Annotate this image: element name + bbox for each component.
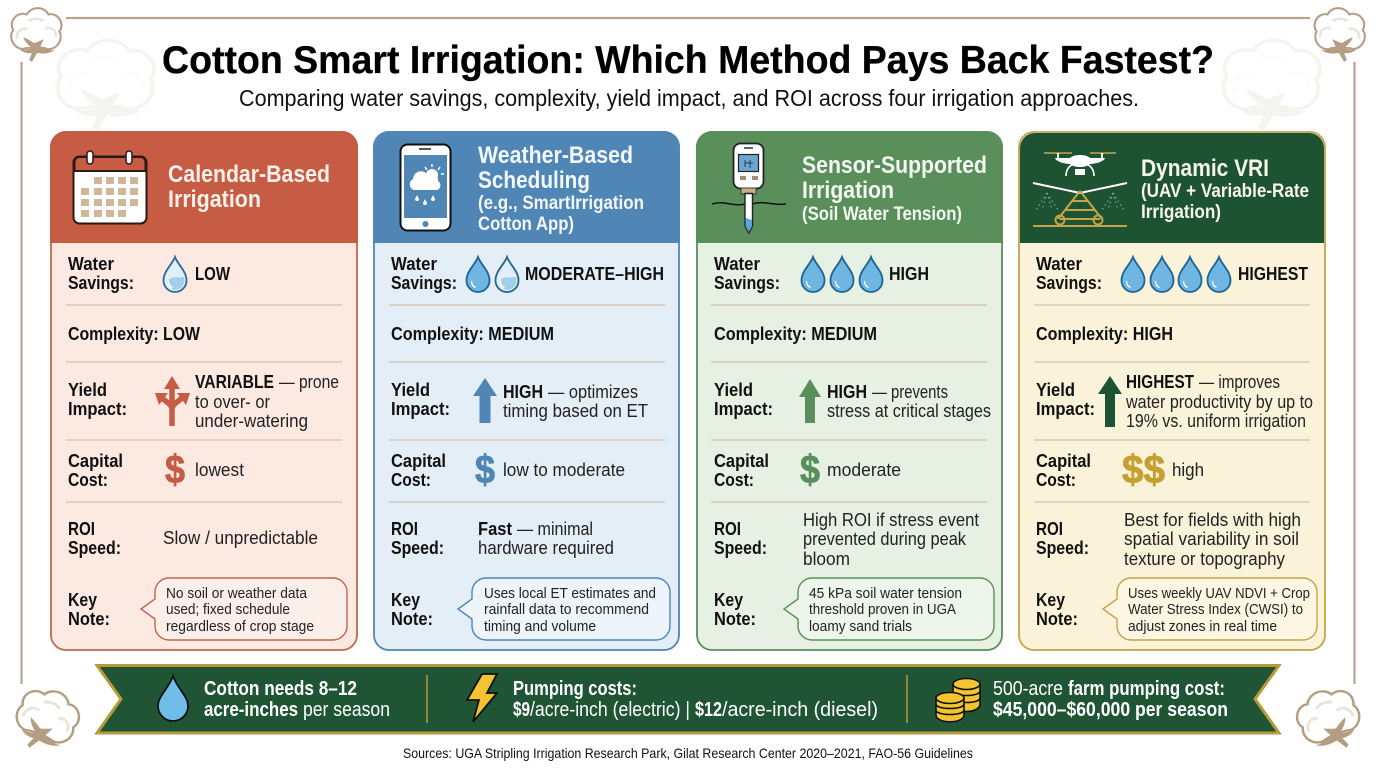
yield impact row xyxy=(714,379,991,423)
roi speed row: texture or topography xyxy=(1124,549,1285,569)
complexity row: Complexity: LOW xyxy=(68,324,200,344)
key note callout: Key xyxy=(1036,590,1065,610)
icon: drone and pivot irrigation xyxy=(1033,153,1127,226)
complexity row: Complexity: MEDIUM xyxy=(714,324,877,344)
water savings row: Water xyxy=(1036,254,1082,274)
key note callout: Note: xyxy=(68,609,110,629)
water savings row: Savings: xyxy=(714,273,780,293)
roi speed row: ROI xyxy=(68,519,95,539)
fact: pumping costs: $12 xyxy=(695,699,722,721)
key note callout: Uses weekly UAV NDVI + Crop xyxy=(1128,586,1310,602)
yield impact row: Impact: xyxy=(68,399,127,419)
icon: lightning bolt xyxy=(467,674,497,722)
key note callout: 45 kPa soil water tension xyxy=(809,586,962,602)
key note callout: No soil or weather data xyxy=(166,586,308,602)
key note callout: adjust zones in real time xyxy=(1128,619,1277,635)
icon: branching arrows xyxy=(155,376,190,426)
roi speed row: bloom xyxy=(803,549,850,569)
roi speed row xyxy=(68,519,318,558)
heading xyxy=(1141,155,1309,223)
subtitle: Comparing water savings, complexity, yield impact, and ROI across four irrigation approaches. xyxy=(239,85,1139,111)
yield impact row: Yield xyxy=(714,380,753,400)
roi speed row: Fast xyxy=(478,519,512,539)
key note callout: Note: xyxy=(391,609,433,629)
heading: (e.g., SmartIrrigation xyxy=(478,193,644,214)
water savings row: HIGHEST xyxy=(1238,264,1308,284)
key note callout: Water Stress Index (CWSI) to xyxy=(1128,602,1303,618)
panel: weather-based scheduling xyxy=(373,131,680,650)
heading: Weather-Based xyxy=(478,142,633,169)
fact: water need: Cotton needs 8–12 xyxy=(204,678,357,700)
heading: Dynamic VRI xyxy=(1141,155,1269,182)
water savings row: Water xyxy=(714,254,760,274)
icon: cotton boll bottom right xyxy=(1290,681,1369,761)
yield impact row: — improves xyxy=(1199,372,1280,392)
roi speed row: Best for fields with high xyxy=(1124,510,1301,530)
heading: Scheduling xyxy=(478,167,590,194)
yield impact row: Impact: xyxy=(714,399,773,419)
yield impact row: Yield xyxy=(68,380,107,400)
capital cost row: Capital xyxy=(391,451,446,471)
fact: water need xyxy=(158,676,390,721)
key note callout: timing and volume xyxy=(484,619,596,635)
yield impact row: — optimizes xyxy=(548,382,638,402)
key note callout: Uses local ET estimates and xyxy=(484,586,656,602)
watermark: cotton right xyxy=(1223,40,1320,131)
complexity row: Complexity: MEDIUM xyxy=(391,324,554,344)
capital cost row: Cost: xyxy=(391,470,431,490)
sources: Sources: UGA Stripling Irrigation Research Park, Gilat Research Center 2020–2021, FAO-56 Guidelines xyxy=(403,745,973,761)
water savings row xyxy=(1036,254,1308,293)
icon: cotton boll bottom left xyxy=(7,681,86,761)
heading xyxy=(802,152,987,225)
key note callout: Key xyxy=(68,590,97,610)
key note callout: threshold proven in UGA xyxy=(809,602,956,618)
yield impact row: Impact: xyxy=(1036,399,1095,419)
capital cost row: Capital xyxy=(714,451,769,471)
fact: pumping costs xyxy=(467,674,878,722)
capital cost row xyxy=(1036,448,1204,492)
roi speed row: Speed: xyxy=(714,538,767,558)
key note callout xyxy=(391,578,670,640)
water savings row: Savings: xyxy=(1036,273,1102,293)
key note callout: Note: xyxy=(1036,609,1078,629)
water savings row: HIGH xyxy=(889,264,929,284)
icon: up arrow xyxy=(473,378,497,423)
key note callout: Note: xyxy=(714,609,756,629)
complexity row: Complexity: HIGH xyxy=(1036,324,1173,344)
capital cost row: $ xyxy=(165,448,185,492)
capital cost row: Cost: xyxy=(714,470,754,490)
yield impact row: under-watering xyxy=(195,411,308,431)
yield impact row: timing based on ET xyxy=(503,401,648,421)
capital cost row xyxy=(391,448,625,492)
capital cost row: Capital xyxy=(68,451,123,471)
watermark: cotton left xyxy=(57,40,154,131)
yield impact row: HIGH xyxy=(827,382,867,402)
title: Cotton Smart Irrigation: Which Method Pays Back Fastest? xyxy=(162,39,1214,82)
key note callout: loamy sand trials xyxy=(809,619,912,635)
fact: pumping costs: Pumping costs: xyxy=(513,678,637,700)
key note callout: Key xyxy=(391,590,420,610)
icon: soil sensor probe xyxy=(712,144,786,233)
capital cost row: $$ xyxy=(1122,448,1165,492)
fact: farm cost: 500-acre xyxy=(993,678,1063,700)
yield impact row: to over- or xyxy=(195,392,270,412)
fact: water need: per season xyxy=(303,699,390,721)
roi speed row xyxy=(714,510,979,569)
roi speed row: Speed: xyxy=(391,538,444,558)
roi speed row xyxy=(1036,510,1301,569)
fact: pumping costs: /acre-inch (diesel) xyxy=(722,699,878,721)
water savings row: LOW xyxy=(195,264,230,284)
water savings row xyxy=(714,254,929,293)
key note callout: rainfall data to recommend xyxy=(484,602,649,618)
yield impact row: HIGHEST xyxy=(1126,372,1194,392)
key note callout xyxy=(68,578,347,640)
icon: cotton boll top left xyxy=(11,8,61,62)
roi speed row xyxy=(391,519,614,558)
water savings row: Savings: xyxy=(391,273,457,293)
heading: (UAV + Variable-Rate xyxy=(1141,181,1309,202)
yield impact row: stress at critical stages xyxy=(827,401,991,421)
yield impact row xyxy=(1036,372,1313,431)
roi speed row: Speed: xyxy=(68,538,121,558)
yield impact row: Yield xyxy=(391,380,430,400)
fact: farm cost: farm pumping cost: xyxy=(1068,678,1225,700)
capital cost row: $ xyxy=(475,448,495,492)
capital cost row: Cost: xyxy=(1036,470,1076,490)
yield impact row: Yield xyxy=(1036,380,1075,400)
heading: (Soil Water Tension) xyxy=(802,204,962,225)
yield impact row: Impact: xyxy=(391,399,450,419)
heading xyxy=(168,161,330,213)
roi speed row: — minimal xyxy=(517,519,593,539)
yield impact row: VARIABLE xyxy=(195,372,274,392)
key note callout: regardless of crop stage xyxy=(166,619,314,635)
heading: Sensor-Supported xyxy=(802,152,987,179)
panel: calendar-based irrigation xyxy=(50,131,358,650)
icon: water drop xyxy=(158,676,188,721)
heading: Calendar-Based xyxy=(168,161,330,188)
banner: key facts xyxy=(97,666,1279,733)
yield impact row: — prone xyxy=(279,372,339,392)
roi speed row: spatial variability in soil xyxy=(1124,529,1299,549)
roi speed row: ROI xyxy=(391,519,418,539)
water savings row: Water xyxy=(391,254,437,274)
fact: farm cost: $45,000–$60,000 per season xyxy=(993,699,1228,721)
capital cost row: Capital xyxy=(1036,451,1091,471)
heading: Cotton App) xyxy=(478,214,574,235)
heading: Irrigation) xyxy=(1141,202,1221,223)
icon: smartphone with weather xyxy=(400,144,450,230)
yield impact row: — prevents xyxy=(872,382,948,402)
water savings row: MODERATE–HIGH xyxy=(525,264,664,284)
capital cost row xyxy=(714,448,901,492)
capital cost row: high xyxy=(1172,460,1204,480)
capital cost row: moderate xyxy=(827,460,901,480)
roi speed row: ROI xyxy=(1036,519,1063,539)
capital cost row: lowest xyxy=(195,460,244,480)
capital cost row: Cost: xyxy=(68,470,108,490)
roi speed row: ROI xyxy=(714,519,741,539)
heading: Irrigation xyxy=(168,186,261,213)
fact: farm cost xyxy=(936,678,1228,722)
yield impact row: 19% vs. uniform irrigation xyxy=(1126,411,1306,431)
yield impact row: HIGH xyxy=(503,382,543,402)
fact: water need: acre-inches xyxy=(204,699,298,721)
icon: up arrow xyxy=(799,379,821,423)
key note callout xyxy=(1036,578,1317,640)
water savings row xyxy=(391,254,664,293)
yield impact row xyxy=(391,378,648,423)
roi speed row: prevented during peak xyxy=(803,529,967,549)
icon: coin stacks xyxy=(936,678,980,722)
capital cost row: $ xyxy=(800,448,820,492)
roi speed row: High ROI if stress event xyxy=(803,510,979,530)
key note callout: used; fixed schedule xyxy=(166,602,290,618)
yield impact row xyxy=(68,372,339,431)
panel: sensor-supported irrigation xyxy=(696,131,1003,650)
capital cost row xyxy=(68,448,244,492)
water savings row: Savings: xyxy=(68,273,134,293)
capital cost row: low to moderate xyxy=(503,460,625,480)
roi speed row: Slow / unpredictable xyxy=(163,528,318,548)
icon: calendar xyxy=(74,151,146,224)
yield impact row: water productivity by up to xyxy=(1125,392,1313,412)
fact: pumping costs: /acre-inch (electric) | xyxy=(530,699,690,721)
water savings row: Water xyxy=(68,254,114,274)
panel: dynamic VRI xyxy=(1019,132,1325,650)
heading: Irrigation xyxy=(802,177,894,204)
icon: up arrow xyxy=(1098,376,1122,427)
icon: cotton boll top right xyxy=(1315,8,1365,62)
fact: pumping costs: $9 xyxy=(513,699,530,721)
water savings row xyxy=(68,254,230,293)
key note callout: Key xyxy=(714,590,743,610)
roi speed row: Speed: xyxy=(1036,538,1089,558)
key note callout xyxy=(714,578,994,640)
heading xyxy=(478,142,644,235)
roi speed row: hardware required xyxy=(478,538,614,558)
